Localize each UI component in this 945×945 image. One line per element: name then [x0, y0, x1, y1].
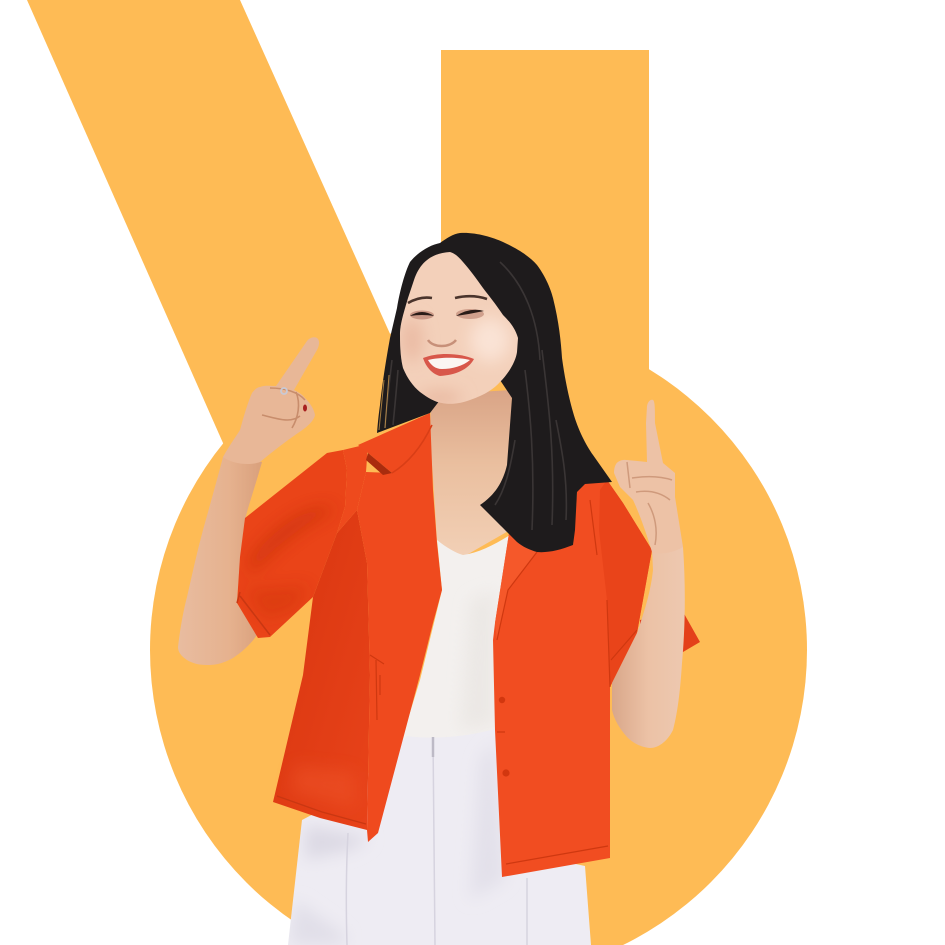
placket line [370, 655, 384, 720]
teeth [428, 358, 470, 369]
right hand finger creases [627, 462, 672, 545]
collar fold [392, 425, 432, 473]
right arm [612, 547, 685, 748]
hair highlights [385, 262, 566, 530]
left shirt under panel [273, 510, 370, 830]
left sleeve [237, 450, 347, 638]
left sleeve cuff line [237, 592, 270, 635]
collar notch [366, 453, 392, 475]
top shading [460, 590, 495, 730]
eyes [410, 309, 484, 320]
right cuff line [611, 630, 637, 660]
ring and nail [281, 388, 307, 412]
hair strands against orange [379, 375, 389, 430]
eyebrows [408, 296, 487, 303]
left sleeve shadows [250, 506, 325, 614]
nose [428, 340, 456, 346]
shirt buttons [499, 697, 510, 777]
left hand pointing [223, 337, 319, 464]
right shirt fold lines [497, 500, 610, 864]
face [400, 252, 518, 404]
right sleeve back flap [640, 610, 700, 668]
trouser seams [346, 737, 527, 945]
left front panel [357, 413, 442, 842]
left panel sheen [290, 765, 355, 808]
trouser shadows [291, 766, 500, 942]
white top [400, 535, 510, 745]
left arm [178, 457, 262, 665]
right hand pointing [614, 400, 683, 553]
right sleeve panel [599, 480, 652, 687]
neck and chest [430, 390, 512, 557]
shoulder strip [337, 444, 368, 533]
white trousers [288, 729, 591, 945]
zipper [432, 737, 434, 757]
left hand finger creases [262, 388, 305, 428]
person [178, 233, 700, 945]
left shirt hem [277, 796, 366, 824]
cheek shading [402, 318, 510, 404]
right lapel [495, 527, 537, 640]
hair [377, 233, 612, 552]
right shirt body [493, 470, 652, 877]
smile lips [423, 354, 474, 376]
